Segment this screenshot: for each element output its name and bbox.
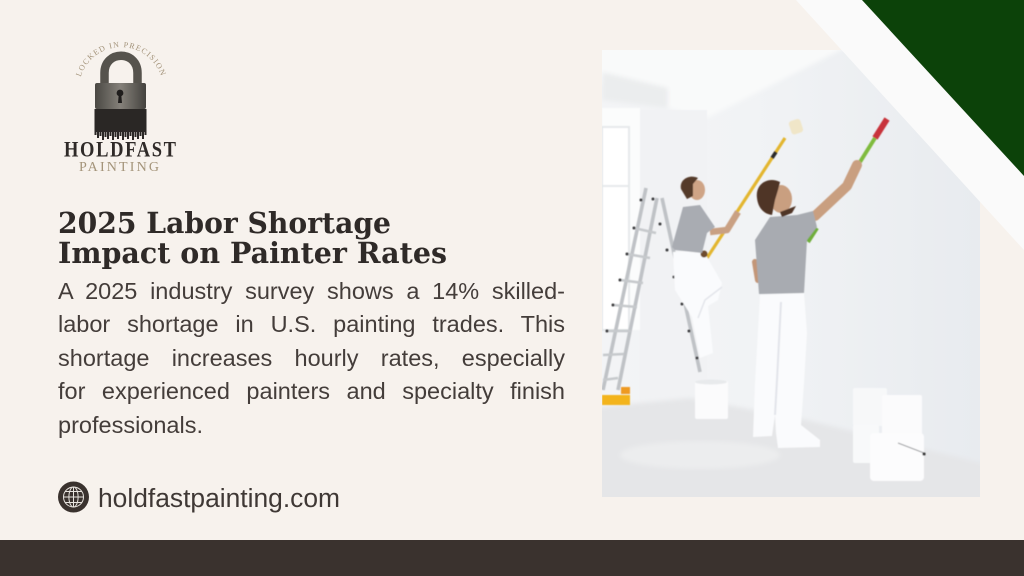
- back bucket: [695, 381, 728, 419]
- icon: padlock shackle: [104, 56, 138, 84]
- shirt: [672, 205, 715, 253]
- title line 2: Impact on Painter Rates: [58, 236, 447, 270]
- pants: [673, 250, 722, 358]
- logo: Holdfast Painting: [64, 42, 176, 175]
- yellow paint tray: [602, 395, 630, 405]
- floor covering: [602, 400, 941, 497]
- buckets right: [853, 388, 926, 481]
- ceiling: [696, 50, 838, 110]
- icon: keyhole: [117, 90, 123, 103]
- icon: padlock body: [95, 83, 146, 109]
- body text: A 2025 industry survey shows a 14% skilled-: [58, 278, 565, 304]
- footer bar: [0, 540, 1024, 576]
- body text: [58, 278, 565, 438]
- painter on ladder: [672, 118, 804, 358]
- body text: for experienced painters and specialty finish: [58, 378, 565, 404]
- corner band: white diagonal: [796, 0, 1024, 250]
- icon: globe: [58, 482, 89, 512]
- logo tagline: LOCKED IN PRECISION: [76, 42, 166, 77]
- yellow pole and roller: [707, 138, 785, 258]
- room: [590, 40, 990, 505]
- logo wordmark: HOLDFAST: [64, 138, 176, 162]
- ladder: [603, 188, 700, 390]
- ceiling beam: [602, 74, 668, 106]
- logo sub-wordmark: PAINTING: [79, 160, 159, 175]
- raised arm: [815, 165, 857, 216]
- body text: professionals.: [58, 412, 203, 438]
- icon: brush bristles: [96, 109, 146, 140]
- head: [770, 185, 792, 213]
- wall: [602, 50, 980, 497]
- foreground painter: [753, 119, 887, 448]
- window: [602, 108, 640, 330]
- lowered arm: [755, 262, 758, 280]
- body text: shortage increases hourly rates, especially: [58, 345, 565, 371]
- corner: green triangle: [862, 0, 1024, 176]
- shirt: [755, 211, 817, 294]
- left wall: [698, 110, 703, 112]
- title: [58, 206, 447, 270]
- body text: labor shortage in U.S. painting trades. This: [58, 311, 565, 337]
- pants: [753, 293, 820, 448]
- title line 1: 2025 Labor Shortage: [58, 206, 391, 240]
- arm: [710, 212, 738, 232]
- head: [689, 180, 705, 200]
- website url: holdfastpainting.com: [98, 485, 340, 513]
- photo: two painters in a white room: [590, 40, 990, 505]
- green pole: [860, 138, 875, 162]
